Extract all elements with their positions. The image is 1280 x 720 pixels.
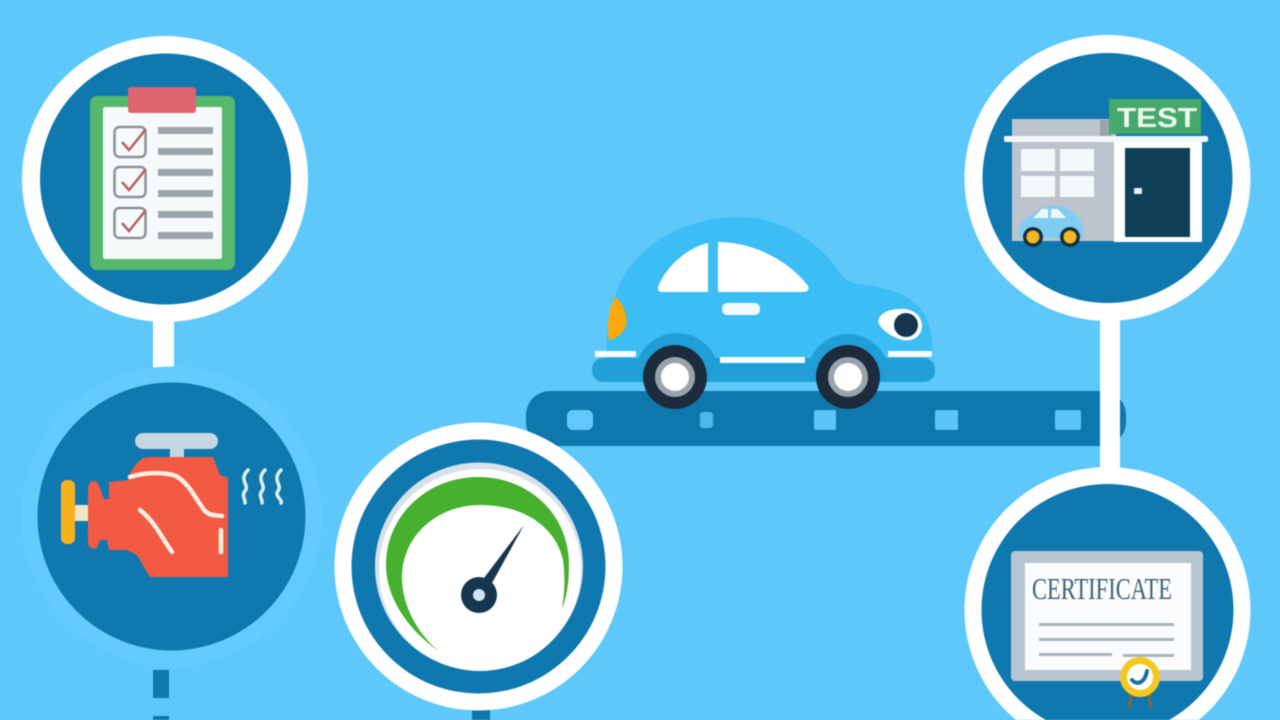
panel: engine — [22, 366, 322, 666]
panel: gauge — [334, 422, 622, 710]
icon: overheating engine — [61, 433, 281, 577]
car door handle — [722, 303, 760, 315]
icon: certificate document: CERTIFICATE — [1032, 571, 1172, 606]
icon: clipboard — [90, 87, 235, 270]
panel: checklist — [22, 36, 308, 322]
car front wheel — [816, 345, 880, 409]
dashed connector below engine — [153, 670, 169, 720]
car front window — [718, 242, 808, 292]
panel: certificate — [964, 467, 1250, 720]
car rear wheel — [643, 345, 707, 409]
icon: small car — [1019, 206, 1083, 247]
icon: certificate seal — [1120, 657, 1160, 708]
connector stub below gauge — [472, 706, 490, 720]
car tail light — [608, 297, 627, 340]
connector: checklist to engine — [153, 318, 174, 368]
icon: certificate document — [1011, 551, 1203, 708]
icon: car — [592, 217, 935, 417]
road with car track — [526, 391, 1126, 446]
icon: gauge needle — [461, 525, 524, 613]
car trim strips — [595, 351, 932, 363]
car headlight — [878, 309, 922, 340]
sign: test — [1109, 99, 1201, 134]
panel: test station — [964, 35, 1250, 321]
icon: test building — [1004, 99, 1208, 247]
car rear window — [658, 243, 708, 292]
connector: test station to certificate — [1100, 316, 1120, 471]
sign: test: TEST — [1117, 102, 1197, 133]
icon: gauge green arc — [386, 477, 569, 652]
